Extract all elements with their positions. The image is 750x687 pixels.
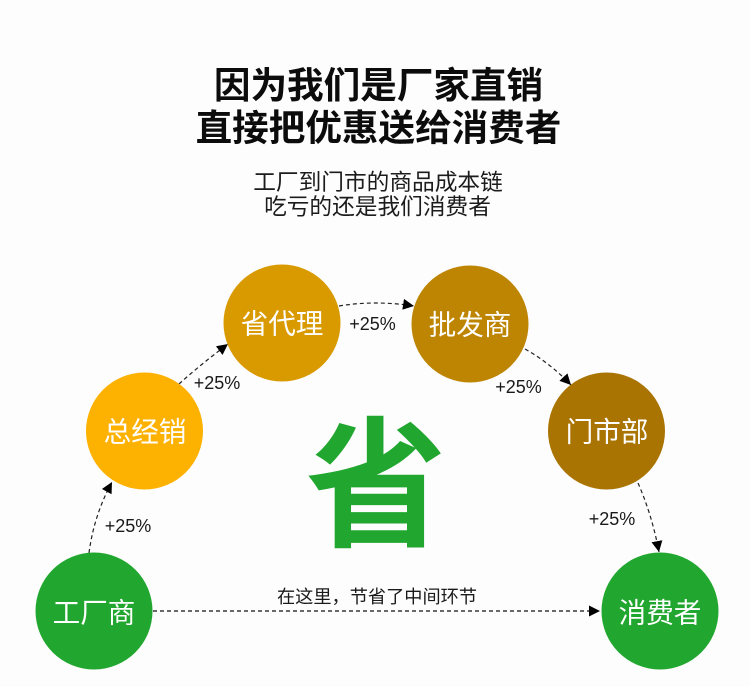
label: +25% distributor step: +25%: [194, 373, 240, 393]
subtitle: 吃亏的还是我们消费者: [264, 194, 491, 220]
node: factory: 工厂商: [53, 598, 135, 628]
label: +25% factory step: +25%: [105, 516, 151, 536]
arrow: factory to general distributor: [89, 482, 112, 553]
node: retail store: [548, 372, 665, 490]
label: +25% wholesaler step: +25%: [495, 377, 542, 397]
subtitle: [253, 169, 503, 220]
arrow: wholesaler to retail store: [525, 349, 571, 385]
node: general distributor: [86, 372, 203, 490]
node: factory: [36, 552, 152, 670]
node: provincial agent: 省代理: [241, 308, 323, 340]
label: direct route note: 在这里，节省了中间环节: [277, 587, 477, 607]
node: wholesaler: [412, 266, 528, 382]
title: [196, 65, 561, 148]
big character: save: 省: [305, 408, 447, 566]
node: wholesaler: 批发商: [429, 310, 511, 340]
node: general distributor: 总经销: [104, 416, 186, 448]
node: consumer: 消费者: [619, 598, 701, 628]
arrow: provincial agent to wholesaler: [339, 303, 414, 306]
subtitle: 工厂到门市的商品成本链: [253, 169, 503, 195]
title: 直接把优惠送给消费者: [196, 108, 561, 148]
arrow: retail store to consumer: [638, 483, 659, 552]
node: consumer: [602, 552, 718, 670]
node: retail store: 门市部: [566, 416, 648, 448]
label: +25% agent step: +25%: [349, 314, 396, 334]
node: provincial agent: [224, 264, 340, 382]
arrow: general distributor to provincial agent: [179, 344, 228, 384]
label: +25% retail step: +25%: [589, 509, 635, 529]
arrow: factory direct to consumer: [153, 610, 600, 612]
title: 因为我们是厂家直销: [214, 65, 543, 106]
